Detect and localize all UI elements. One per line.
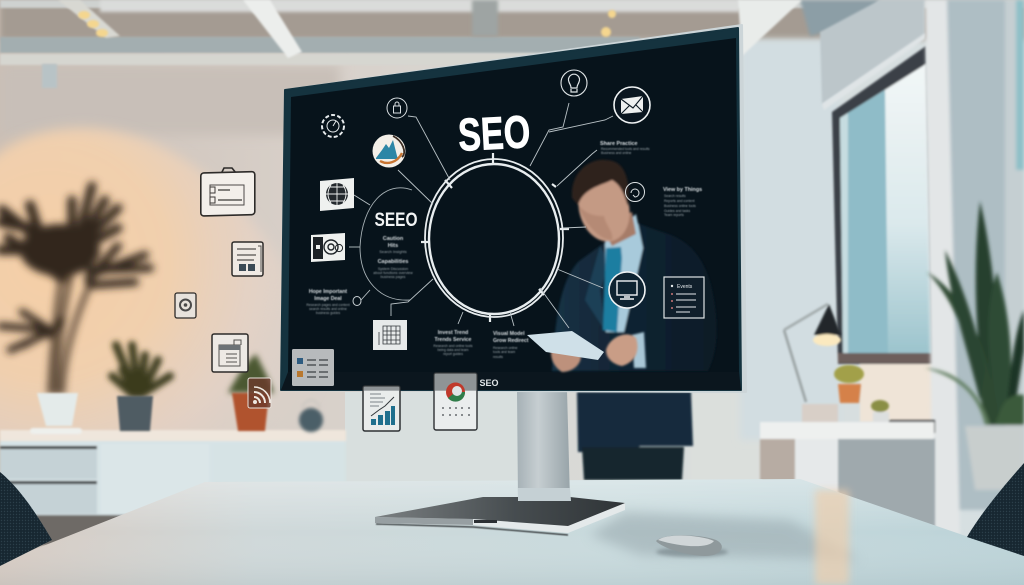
bottom right text: Visual Model <box>493 331 525 337</box>
icon: list panel <box>664 277 704 318</box>
person in screen <box>527 160 717 372</box>
left ellipse text block: about functions overview <box>373 271 413 275</box>
right text: Search results <box>664 194 686 198</box>
floating card: bar chart <box>363 386 400 431</box>
bottom centre text <box>433 330 473 356</box>
monitor stand <box>375 390 625 535</box>
upper right text: Recommended tools and results <box>601 147 650 151</box>
face <box>572 169 636 247</box>
neck <box>600 212 636 246</box>
left ellipse arc <box>360 188 412 300</box>
right text: Reports and content <box>664 199 695 203</box>
right text: Team reports <box>664 213 684 217</box>
bottom bar SEO label: SEO <box>479 378 499 388</box>
warm light on wall <box>0 128 360 440</box>
person lower body <box>577 392 693 480</box>
plant: small left with pot <box>112 345 170 431</box>
left ellipse text block: Search Insights <box>379 249 407 254</box>
left ellipse text block <box>373 236 413 279</box>
left ellipse text block: Hits <box>388 243 398 249</box>
decorative sphere <box>299 400 323 432</box>
bottom centre text: report guides <box>443 352 463 356</box>
icon: list panel: Events <box>677 284 693 290</box>
bottom centre text: being data and team <box>438 348 469 352</box>
lower left text: search results and online <box>309 307 347 311</box>
monitor bezel <box>281 25 746 392</box>
ceiling corner right <box>800 0 880 36</box>
icon: bulb circle <box>561 70 587 96</box>
bottom centre text: Research and online tools <box>433 344 473 348</box>
bottom right text: Research online <box>493 346 518 350</box>
bottom right text: Grow Redirect <box>493 338 529 344</box>
wall above window <box>820 0 925 104</box>
connector lines <box>349 103 613 328</box>
window <box>822 33 934 422</box>
right text: View by Things <box>663 187 702 193</box>
sideboard <box>0 430 346 545</box>
tablet <box>527 331 604 360</box>
icon: envelope circle <box>614 87 650 123</box>
screen heading SEO: SEO <box>457 105 531 161</box>
right text <box>663 187 702 217</box>
floating card: browser logo <box>434 373 477 430</box>
warm reflection on table <box>815 490 849 585</box>
floating card: documents <box>232 242 263 276</box>
left ellipse text block: Capabilities <box>378 259 408 265</box>
bottom centre text: Trends Service <box>435 337 472 343</box>
left ellipse text block: System Discussion <box>378 267 408 271</box>
mouse <box>656 535 728 557</box>
icon: camera square <box>311 233 345 262</box>
icon: monitor circle <box>609 272 645 308</box>
bottom right text: tools and team <box>493 350 515 354</box>
floating card: wifi <box>248 378 271 408</box>
monitor base <box>375 488 625 535</box>
upper right text: Business and online <box>601 151 631 155</box>
floating card: briefcase <box>201 168 255 216</box>
sleeve cuff <box>632 332 646 368</box>
screen <box>288 38 739 372</box>
left ellipse text block: Caution <box>383 236 404 242</box>
lower left text: Research pages and content <box>306 303 350 307</box>
shirt <box>605 214 643 332</box>
floating card: list on screen <box>292 349 334 386</box>
wall column <box>925 0 1024 535</box>
pot: large left <box>30 393 82 434</box>
plant: orange pot <box>228 354 274 431</box>
left ellipse text block: business pages <box>381 275 406 279</box>
lower left text: Hope Important <box>309 289 347 295</box>
chairs <box>0 463 1024 566</box>
icon: small ring <box>353 296 361 306</box>
plant: large left <box>0 186 150 393</box>
lower left text: business guides <box>316 311 340 315</box>
tie <box>603 247 622 332</box>
facial shadow <box>578 205 612 240</box>
icon: calendar grid <box>373 320 407 350</box>
hands <box>606 334 637 366</box>
bottom right text <box>493 331 529 359</box>
lower left text: Image Deal <box>314 296 342 302</box>
lower left text <box>306 289 350 315</box>
shadow on table <box>590 512 860 560</box>
right desk and lamp <box>760 304 935 528</box>
monitor <box>281 25 746 392</box>
table <box>0 479 1024 585</box>
lapel highlight <box>585 246 610 332</box>
icon: lock circle <box>387 98 407 118</box>
icon: mountain chart <box>372 134 406 168</box>
floating card: settings <box>175 293 196 318</box>
upper right text: Share Practice <box>600 141 637 147</box>
icon: globe square <box>320 178 354 211</box>
floating card: form <box>212 334 248 372</box>
jacket <box>552 222 717 371</box>
upper right text <box>600 141 650 155</box>
central ring <box>421 153 569 322</box>
icon: gauge circle <box>322 115 344 137</box>
plant: large right <box>925 201 1024 490</box>
secondary SEO heading: SEEO <box>374 210 418 231</box>
bottom centre text: Invest Trend <box>438 330 468 336</box>
right text: Business online tools <box>664 204 696 208</box>
bottom right text: results <box>493 355 503 359</box>
hair <box>572 160 629 206</box>
right text: Guides and tasks <box>664 209 691 213</box>
right wall <box>740 40 840 440</box>
icon: tiny spiral circle <box>626 182 644 202</box>
